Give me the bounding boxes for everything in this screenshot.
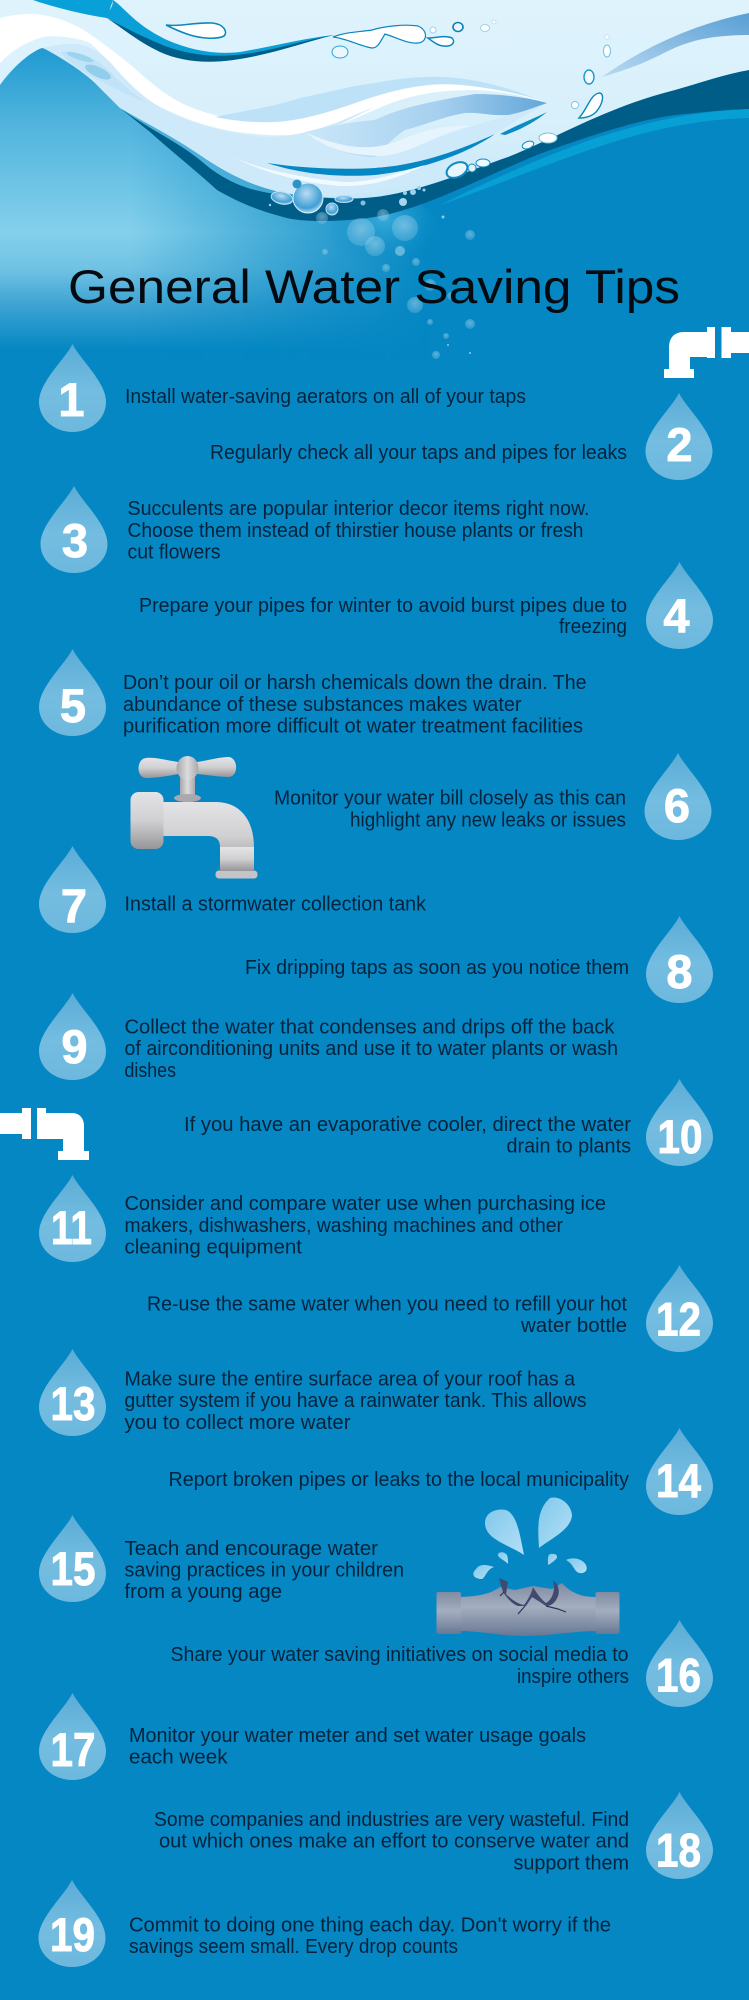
tip 12 xyxy=(147,1265,713,1352)
text 4: freezing xyxy=(559,616,627,638)
number 12: 12 xyxy=(656,1292,701,1346)
number 14: 14 xyxy=(656,1454,701,1507)
text 11: cleaning equipment xyxy=(124,1236,302,1258)
text 2: Regularly check all your taps and pipes for leaks xyxy=(210,442,627,464)
drop 15 xyxy=(39,1515,106,1602)
tip 2 xyxy=(210,393,712,480)
text 5: purification more difficult ot water treatment facilities xyxy=(123,716,583,738)
icon: white pipe top right xyxy=(664,327,749,378)
tip 4 xyxy=(139,562,713,649)
text 19: Commit to doing one thing each day. Don't worry if the xyxy=(129,1914,611,1936)
tip 18 xyxy=(154,1792,713,1879)
icon: silver tap xyxy=(130,756,258,878)
tip 1 xyxy=(39,344,526,432)
drop 5 xyxy=(39,649,106,736)
number 6: 6 xyxy=(664,779,690,832)
icon: burst pipe with water splash xyxy=(436,1497,620,1636)
tip 16 xyxy=(170,1620,713,1707)
text 6: highlight any new leaks or issues xyxy=(350,810,626,832)
text 8: Fix dripping taps as soon as you notice them xyxy=(245,957,629,979)
drop 14 xyxy=(646,1428,713,1515)
tip 10 xyxy=(184,1079,713,1166)
text 16 xyxy=(170,1644,629,1688)
tip 11 xyxy=(39,1175,606,1262)
text 16: Share your water saving initiatives on social media to xyxy=(170,1644,628,1666)
number 7: 7 xyxy=(61,880,87,932)
text 5: Don’t pour oil or harsh chemicals down the drain. The xyxy=(123,672,586,694)
tip 3 xyxy=(40,486,590,573)
tip 7 xyxy=(39,846,427,933)
text 3: Choose them instead of thirstier house plants or fresh xyxy=(128,520,584,542)
drop 16 xyxy=(646,1620,713,1707)
text 17: each week xyxy=(129,1746,229,1768)
tip 5 xyxy=(39,649,586,738)
text 18: Some companies and industries are very wasteful. Find xyxy=(154,1809,629,1831)
number 3: 3 xyxy=(62,514,88,567)
number 11: 11 xyxy=(51,1201,92,1254)
text 5 xyxy=(123,672,586,738)
text 16: inspire others xyxy=(517,1666,629,1688)
tip 13 xyxy=(39,1349,586,1436)
number 13: 13 xyxy=(50,1377,96,1430)
text 12 xyxy=(147,1294,627,1337)
drop 1 xyxy=(39,344,106,432)
drop 18 xyxy=(646,1792,713,1879)
number 18: 18 xyxy=(656,1824,701,1876)
drop 12 xyxy=(646,1265,713,1352)
tip 15 xyxy=(39,1515,404,1603)
text 15: from a young age xyxy=(124,1581,282,1603)
text 13: you to collect more water xyxy=(124,1412,351,1434)
text 10: drain to plants xyxy=(506,1136,631,1158)
text 9 xyxy=(124,1016,618,1082)
number 19: 19 xyxy=(50,1908,95,1961)
text 6 xyxy=(274,788,626,832)
title: General Water Saving Tips xyxy=(68,260,680,313)
number 2: 2 xyxy=(666,418,693,471)
text 12: water bottle xyxy=(520,1315,627,1337)
number 1: 1 xyxy=(58,373,85,426)
text 11: makers, dishwashers, washing machines and other xyxy=(124,1215,563,1237)
drop 10 xyxy=(646,1079,713,1166)
text 9: Collect the water that condenses and drips off the back xyxy=(124,1016,616,1038)
text 13: gutter system if you have a rainwater tank. This allows xyxy=(124,1390,586,1412)
text 10 xyxy=(184,1114,631,1158)
text 15: saving practices in your children xyxy=(124,1560,404,1582)
text 5: abundance of these substances makes water xyxy=(123,694,522,716)
drop 11 xyxy=(39,1175,106,1262)
drop 9 xyxy=(39,993,106,1080)
header wave illustration xyxy=(0,0,749,360)
tip 6 xyxy=(274,753,712,840)
drop 6 xyxy=(644,753,712,840)
number 8: 8 xyxy=(666,945,693,998)
icon: white pipe left xyxy=(0,1108,89,1160)
text 11 xyxy=(124,1193,606,1258)
text 15 xyxy=(124,1538,404,1603)
text 9: dishes xyxy=(124,1060,176,1082)
text 11: Consider and compare water use when purchasing ice xyxy=(124,1193,606,1215)
text 10: If you have an evaporative cooler, direct the water xyxy=(184,1114,631,1136)
text 18 xyxy=(154,1809,629,1874)
drop 3 xyxy=(40,486,108,573)
text 4: Prepare your pipes for winter to avoid burst pipes due to xyxy=(139,595,627,617)
number 9: 9 xyxy=(61,1020,88,1073)
text 13: Make sure the entire surface area of your roof has a xyxy=(124,1368,576,1390)
number 4: 4 xyxy=(663,589,690,642)
tip 19 xyxy=(38,1880,611,1967)
text 12: Re-use the same water when you need to refill your hot xyxy=(147,1294,627,1316)
drop 2 xyxy=(646,393,712,480)
number 10: 10 xyxy=(658,1110,702,1163)
tip 8 xyxy=(245,916,713,1003)
drop 13 xyxy=(39,1349,106,1436)
number 17: 17 xyxy=(50,1723,96,1776)
text 6: Monitor your water bill closely as this can xyxy=(274,788,626,810)
text 3 xyxy=(128,498,590,564)
number 5: 5 xyxy=(60,679,86,732)
text 17 xyxy=(129,1725,586,1768)
drop 4 xyxy=(646,562,713,649)
text 18: out which ones make an effort to conserve water and xyxy=(159,1830,629,1852)
tip 14 xyxy=(168,1428,713,1515)
drop 19 xyxy=(38,1880,106,1967)
text 17: Monitor your water meter and set water usage goals xyxy=(129,1725,586,1747)
number 16: 16 xyxy=(656,1648,701,1702)
text 7: Install a stormwater collection tank xyxy=(124,894,427,916)
drop 17 xyxy=(39,1693,106,1780)
number 15: 15 xyxy=(50,1542,96,1595)
text 19 xyxy=(129,1914,611,1958)
text 1: Install water-saving aerators on all of your taps xyxy=(125,386,526,408)
text 15: Teach and encourage water xyxy=(124,1538,378,1560)
tip 17 xyxy=(39,1693,586,1780)
text 4 xyxy=(139,595,627,638)
text 19: savings seem small. Every drop counts xyxy=(129,1936,458,1958)
text 13 xyxy=(124,1368,586,1434)
tip 9 xyxy=(39,993,618,1082)
text 3: Succulents are popular interior decor items right now. xyxy=(128,498,590,520)
text 3: cut flowers xyxy=(128,542,220,564)
text 9: of airconditioning units and use it to water plants or wash xyxy=(124,1038,618,1060)
drop 8 xyxy=(646,916,713,1003)
text 18: support them xyxy=(514,1852,629,1874)
text 14: Report broken pipes or leaks to the local municipality xyxy=(168,1469,629,1491)
drop 7 xyxy=(39,846,106,933)
